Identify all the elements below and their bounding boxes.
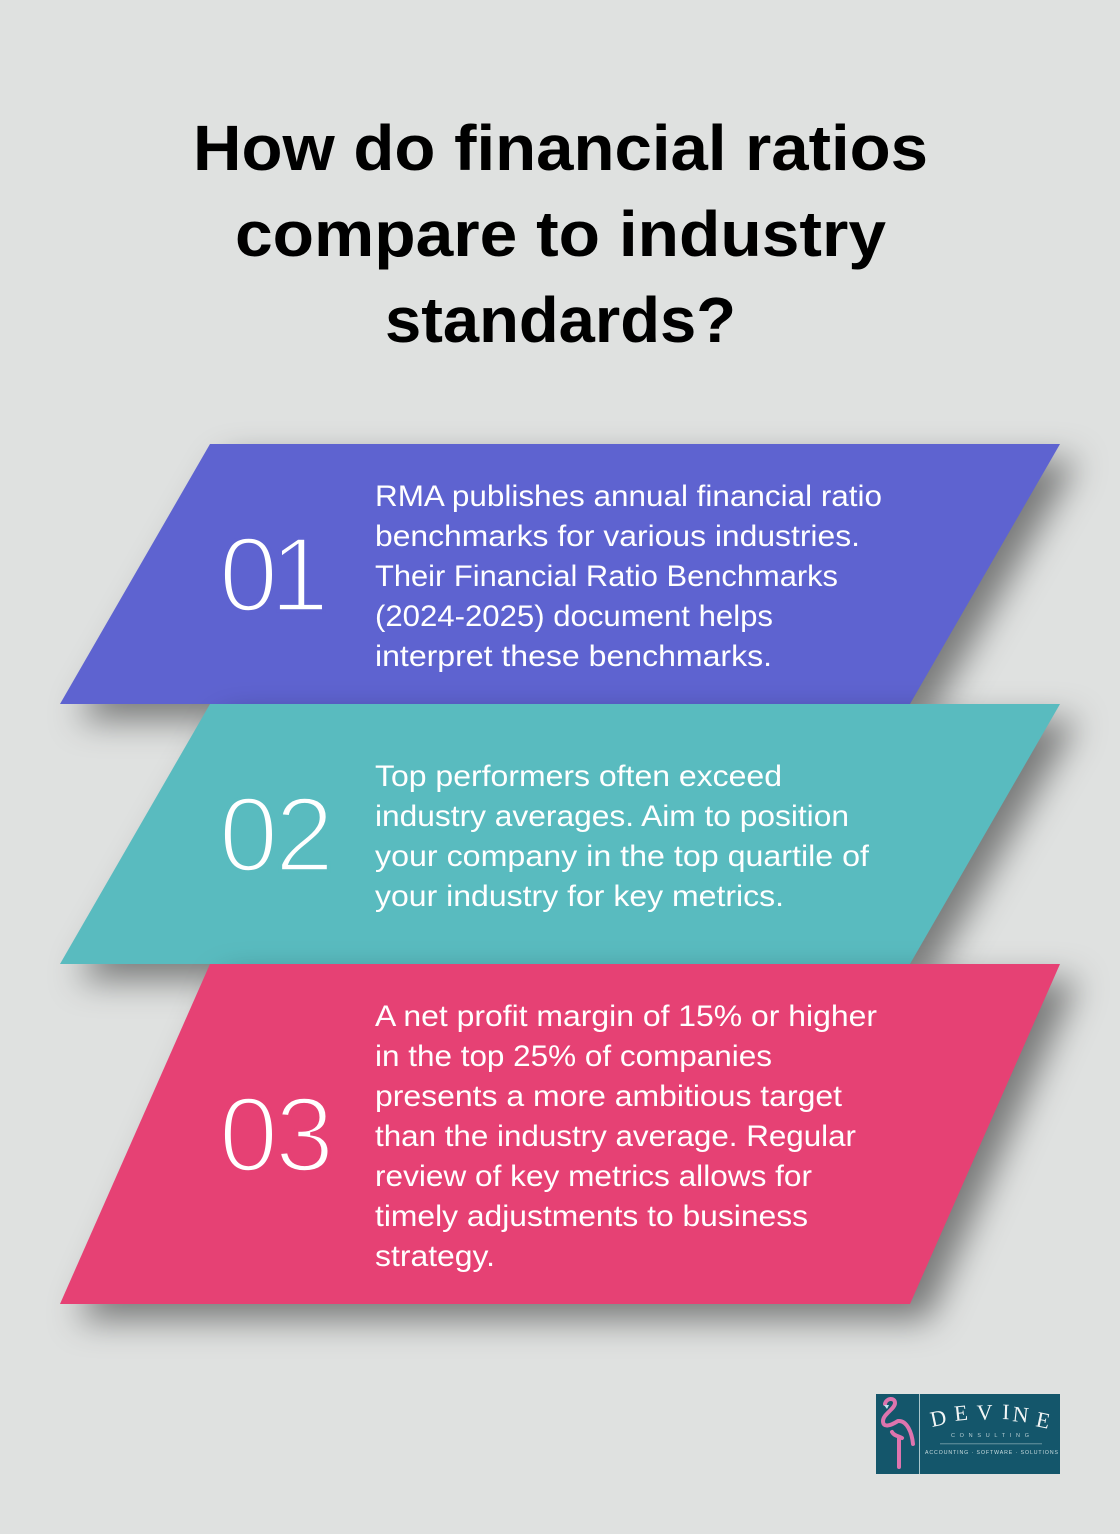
number 02: 02 [219,776,334,894]
text: step 03: strategy. [375,1240,495,1273]
text: step 03: review of key metrics allows for [375,1160,812,1193]
panel: step 02 [60,704,1078,980]
text: step 01: benchmarks for various industries. [375,520,860,553]
wordmark: ACCOUNTING · SOFTWARE · SOLUTIONS [925,1450,1059,1456]
title: How do financial ratios [193,112,928,184]
text: step 02 [375,760,870,913]
number 01: 01 [219,516,329,634]
text: step 02: your industry for key metrics. [375,880,784,913]
panel: step 03 [60,964,1078,1320]
wordmark [925,1399,1059,1456]
title: compare to industry [235,198,886,270]
text: step 03: timely adjustments to business [375,1200,808,1233]
panel: step 01 [60,444,1078,720]
text: step 03: A net profit margin of 15% or higher [375,1000,877,1033]
text: step 01: RMA publishes annual financial ratio [375,480,882,513]
wordmark: DEVINE [928,1399,1052,1434]
text: step 01: interpret these benchmarks. [375,640,772,673]
text: step 03: than the industry average. Regular [375,1120,856,1153]
text: step 03: presents a more ambitious target [375,1080,843,1113]
text: step 03: in the top 25% of companies [375,1040,772,1073]
icon: flamingo [883,1399,913,1467]
text: step 02: industry averages. Aim to position [375,800,849,833]
number 03: 03 [219,1076,334,1194]
title [193,112,928,356]
text: step 02: your company in the top quartile of [375,840,870,873]
text: step 01 [375,480,882,673]
text: step 01: Their Financial Ratio Benchmarks [375,560,838,593]
logo: Devine Consulting [876,1394,1060,1474]
text: step 01: (2024-2025) document helps [375,600,773,633]
wordmark: CONSULTING [951,1433,1029,1439]
text: step 02: Top performers often exceed [375,760,782,793]
title: standards? [385,284,736,356]
text: step 03 [375,1000,877,1273]
